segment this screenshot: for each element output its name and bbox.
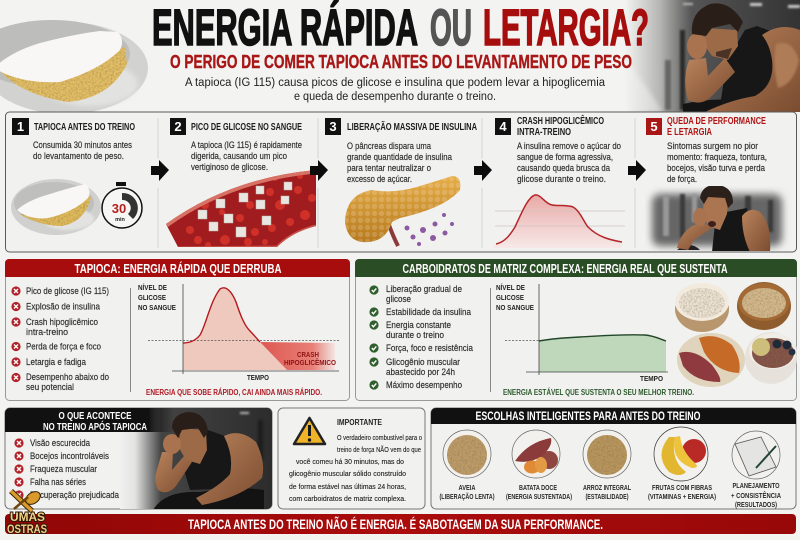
arrow <box>310 160 328 181</box>
step 1: 1 <box>17 119 24 134</box>
step 3: para tentar neutralizar o <box>347 163 431 173</box>
note text: com carboidratos de matriz complexa. <box>289 494 406 503</box>
illustration: pancreas with insulin <box>345 176 460 246</box>
chart: crash curve <box>492 195 625 248</box>
image: bowl with berries and grains <box>745 332 797 384</box>
choice: fruit <box>648 427 716 501</box>
photo: athlete gasping <box>652 185 782 252</box>
panel: important note: IMPORTANTE <box>337 418 383 427</box>
list: symptoms: Bocejos incontroláveis <box>30 451 109 461</box>
list: tapioca effects: intra-treino <box>26 327 68 337</box>
note text: O verdadeiro combustível para o <box>337 433 422 442</box>
step 5: Sintomas surgem no pior <box>667 141 758 151</box>
title: ENERGIA RÁPIDA <box>152 0 418 56</box>
note text <box>289 433 422 503</box>
step 2: digerida, causando um pico <box>191 151 287 161</box>
subtitle: O PERIGO DE COMER TAPIOCA ANTES DO LEVANTAMENTO DE PESO <box>170 52 632 72</box>
step 3: O pâncreas dispara uma <box>347 141 431 151</box>
list: symptoms: Falha nas séries <box>30 477 86 487</box>
choice: oats <box>440 430 495 501</box>
step 1: TAPIOCA ANTES DO TREINO <box>34 122 135 133</box>
list: tapioca effects: Perda de força e foco <box>26 342 101 352</box>
list: complex carb benefits: glicose <box>386 294 411 304</box>
choice: oats: AVEIA <box>458 483 476 492</box>
step 3 <box>325 118 477 184</box>
list: symptoms: Visão escurecida <box>30 438 90 448</box>
panel header: ESCOLHAS INTELIGENTES PARA ANTES DO TREINO <box>476 411 701 423</box>
chart: stable glucose: NO SANGUE <box>496 303 534 312</box>
list: tapioca effects: Pico de glicose (IG 115) <box>26 286 109 296</box>
step 4: CRASH HIPOGLICÊMICO <box>517 114 604 127</box>
step 4: A insulina remove o açúcar do <box>517 141 621 151</box>
panel header <box>5 259 350 277</box>
step 5: 5 <box>650 119 658 134</box>
note text: glicogênio muscular sólido construído <box>289 469 406 478</box>
list: complex carb benefits: Estabilidade da insulina <box>386 307 471 317</box>
chart: stable glucose: TEMPO <box>640 374 663 383</box>
chart: glucose spike <box>138 283 339 382</box>
step 4: causando queda brusca da <box>517 163 610 173</box>
list: complex carb benefits: Energia constante <box>386 320 451 330</box>
step 1: do levantamento de peso. <box>33 151 124 161</box>
choice: brown rice: ARROZ INTEGRAL <box>583 483 631 492</box>
image: oats bowl <box>737 282 791 330</box>
photo: tired athlete in gym <box>625 0 800 112</box>
panel header <box>431 408 796 424</box>
choice: sweet potato: (ENERGIA SUSTENTADA) <box>506 492 572 501</box>
arrow <box>628 160 646 181</box>
logo: Umas e Ostras: OSTRAS <box>7 522 47 536</box>
chart caption: ENERGIA QUE SOBE RÁPIDO, CAI AINDA MAIS RÁPIDO. <box>146 388 322 397</box>
step 5: QUEDA DE PERFORMANCE <box>667 116 766 127</box>
illustration: blood vessel with sugar cubes <box>166 170 316 247</box>
list: tapioca effects: seu potencial <box>26 382 74 392</box>
step 2: PICO DE GLICOSE NO SANGUE <box>191 122 302 133</box>
panel header: NO TREINO APÓS TAPIOCA <box>43 420 147 433</box>
title: OU <box>430 0 472 56</box>
choice: planning <box>731 431 781 509</box>
step 5: momento: fraqueza, tontura, <box>667 152 767 162</box>
step 4: glicose durante o treino. <box>517 174 606 184</box>
note text: você comeu há 30 minutos, mas do <box>296 457 404 466</box>
step 3: 3 <box>329 119 337 134</box>
image: rice bowl <box>675 283 729 332</box>
choice: planning: (RESULTADOS) <box>735 500 777 509</box>
image: tapioca on plate <box>0 20 148 114</box>
icon: stopwatch 30 min: 30 <box>112 201 126 216</box>
choice: planning: + CONSISTÊNCIA <box>731 491 781 500</box>
chart: stable glucose <box>496 283 668 383</box>
chart: glucose spike: NÍVEL DE <box>138 283 167 292</box>
panel: what happens in training <box>5 408 272 510</box>
step 2: A tapioca (IG 115) é rapidamente <box>191 140 302 150</box>
photo: exhausted athlete <box>120 408 272 510</box>
arrow <box>474 160 492 181</box>
choice: sweet potato <box>506 430 572 501</box>
step 2: vertiginoso de glicose. <box>191 162 268 172</box>
panel: complex carbohydrates <box>355 259 797 400</box>
list: complex carb benefits <box>369 284 473 390</box>
step 1 <box>11 118 135 235</box>
footer banner: TAPIOCA ANTES DO TREINO NÃO É ENERGIA. É SABOTAGEM DA SUA PERFORMANCE. <box>188 515 603 532</box>
image: sweet potatoes on plate <box>677 333 745 387</box>
list: tapioca effects: Desempenho abaixo do <box>26 372 109 382</box>
step 2 <box>170 118 302 172</box>
list: complex carb benefits: Força, foco e resistência <box>386 343 473 353</box>
step 4 <box>495 114 621 184</box>
intro text <box>185 77 606 103</box>
step 5: bocejos, visão turva e perda <box>667 163 765 173</box>
chart: stable glucose: GLICOSE <box>496 293 524 302</box>
intro text: e queda de desempenho durante o treino. <box>294 91 496 103</box>
list: complex carb benefits: durante o treino <box>386 330 444 340</box>
chart: glucose spike: HIPOGLICÊMICO <box>284 358 336 367</box>
panel: five step sequence <box>6 112 796 252</box>
list: tapioca effects: Crash hipoglicêmico <box>26 317 98 327</box>
step 4: sangue de forma agressiva, <box>517 152 613 162</box>
list: complex carb benefits: Máximo desempenho <box>386 380 462 390</box>
choice: fruit: (VITAMINAS + ENERGIA) <box>648 492 716 501</box>
step 1: Consumida 30 minutos antes <box>33 140 132 150</box>
choice: sweet potato: BATATA DOCE <box>519 483 557 492</box>
chart: glucose spike: CRASH <box>297 350 319 359</box>
icon: small tapioca plate <box>11 179 101 235</box>
panel header: TAPIOCA: ENERGIA RÁPIDA QUE DERRUBA <box>74 261 282 276</box>
logo: Umas e Ostras <box>7 489 47 536</box>
list: complex carb benefits: Liberação gradual de <box>386 284 462 294</box>
step 3: LIBERAÇÃO MASSIVA DE INSULINA <box>347 120 477 133</box>
list: symptoms: Recuperação prejudicada <box>30 490 119 500</box>
intro text: A tapioca (IG 115) causa picos de glicose e insulina que podem levar a hipoglicemia <box>185 77 606 89</box>
choice: brown rice: (ESTABILIDADE) <box>586 492 629 501</box>
list: complex carb benefits: abastecido por 24h <box>386 367 455 377</box>
arrow <box>151 160 169 181</box>
list: tapioca effects: Letargia e fadiga <box>26 357 86 367</box>
step 4: 4 <box>499 119 507 134</box>
footer banner <box>5 514 796 534</box>
list: complex carb benefits: Glicogênio muscular <box>386 357 460 367</box>
panel header: O QUE ACONTECE <box>58 410 132 422</box>
step 5 <box>646 116 767 184</box>
chart: glucose spike: NO SANGUE <box>138 303 176 312</box>
list: tapioca effects: Explosão de insulina <box>26 302 100 312</box>
list: symptoms: Fraqueza muscular <box>30 464 97 474</box>
step 3: excesso de açúcar. <box>347 174 412 184</box>
list: symptoms <box>14 438 119 500</box>
step 5: de força. <box>667 174 697 184</box>
step 2: 2 <box>174 119 182 134</box>
step 3: grande quantidade de insulina <box>347 152 452 162</box>
title: LETARGIA? <box>483 0 649 56</box>
panel: tapioca <box>5 259 350 400</box>
step 4: INTRA-TREINO <box>517 127 571 138</box>
icon: warning triangle <box>294 418 325 444</box>
logo: Umas e Ostras: UMAS <box>10 510 45 524</box>
icon: stopwatch 30 min <box>102 182 142 228</box>
chart caption: ENERGIA ESTÁVEL QUE SUSTENTA O SEU MELHOR TREINO. <box>503 388 694 397</box>
step 5: E LETARGIA <box>667 127 712 138</box>
note text: treino de força NÃO vem do que <box>337 445 421 454</box>
panel header <box>5 408 174 433</box>
choice: planning: PLANEJAMENTO <box>732 481 780 490</box>
chart: stable glucose: NÍVEL DE <box>496 283 525 292</box>
chart: glucose spike: TEMPO <box>247 373 269 382</box>
choice: oats: (LIBERAÇÃO LENTA) <box>440 492 495 501</box>
chart: glucose spike: GLICOSE <box>138 293 166 302</box>
choice: brown rice <box>583 430 631 501</box>
note text: de forma estável nas últimas 24 horas, <box>289 482 406 491</box>
icon: stopwatch 30 min: min <box>115 217 126 223</box>
panel: smart choices <box>431 408 796 509</box>
panel: important note <box>278 408 425 509</box>
list: tapioca effects <box>11 286 109 392</box>
choice: fruit: FRUTAS COM FIBRAS <box>652 483 712 492</box>
